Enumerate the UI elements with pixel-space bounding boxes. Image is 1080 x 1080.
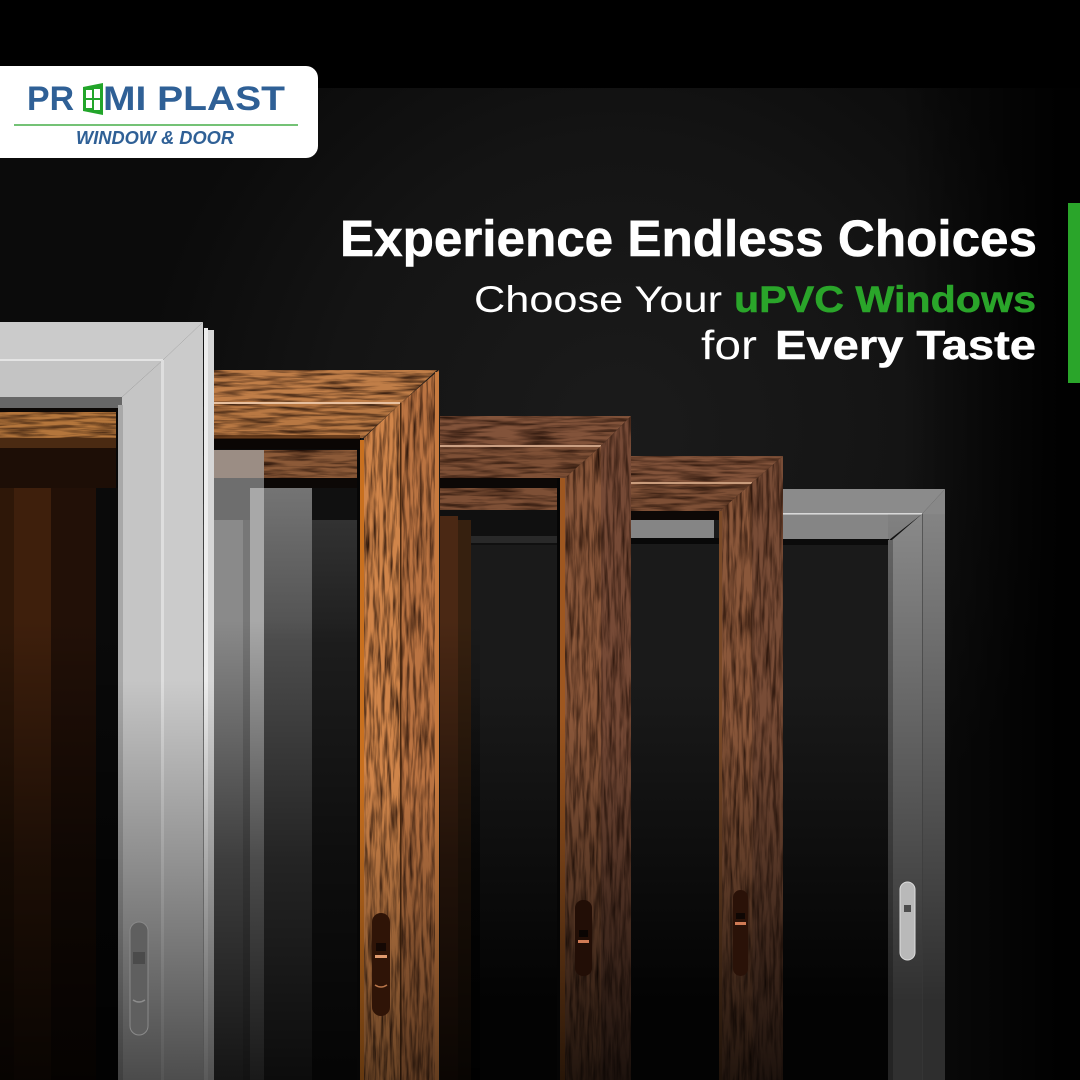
title: Experience Endless Choices [340, 210, 1037, 267]
window frame: dark walnut wide [440, 416, 631, 1080]
glass: wide walnut window [440, 478, 562, 1080]
subtitle line one [474, 279, 1036, 320]
logo wordmark: MI PLAST [103, 80, 285, 118]
handle: grey [900, 882, 915, 960]
logo panel [0, 66, 318, 158]
window frame: grey [783, 489, 945, 1080]
headline [340, 210, 1037, 368]
window frame: white [0, 322, 214, 1080]
stile: wide walnut [560, 416, 631, 1080]
top rail: wide walnut [440, 416, 631, 478]
top rail: golden oak [214, 370, 437, 438]
glass: white window with wood reflection [0, 397, 122, 1080]
handle: wide walnut [575, 900, 592, 976]
logo wordmark: PR [27, 80, 74, 118]
handle: golden oak [372, 913, 390, 1016]
glass: narrow walnut window [631, 511, 721, 1080]
stile: grey [888, 489, 945, 1080]
subtitle line one: Choose Your [474, 279, 722, 320]
window frame: golden oak [214, 370, 439, 1080]
subtitle line one: uPVC Windows [734, 279, 1036, 320]
handle: narrow walnut [733, 890, 748, 976]
subtitle line two [701, 322, 1036, 368]
stile: narrow walnut [719, 456, 783, 1080]
subtitle line two: Every Taste [775, 322, 1036, 368]
top rail: narrow walnut [631, 456, 783, 511]
top rail: white [0, 322, 203, 397]
window frame: dark walnut narrow [631, 456, 783, 1080]
subtitle line two: for [701, 322, 757, 368]
glass: oak window with reflections [214, 437, 361, 1080]
glass: grey window [783, 540, 889, 1080]
green accent bar [1068, 203, 1080, 383]
stile: white [118, 322, 214, 1080]
top rail: grey [783, 489, 945, 545]
logo wordmark [27, 80, 285, 118]
stile: golden oak [360, 370, 439, 1080]
logo tagline: WINDOW & DOOR [76, 128, 234, 148]
handle: white [130, 922, 148, 1035]
icon: green window [83, 83, 103, 115]
